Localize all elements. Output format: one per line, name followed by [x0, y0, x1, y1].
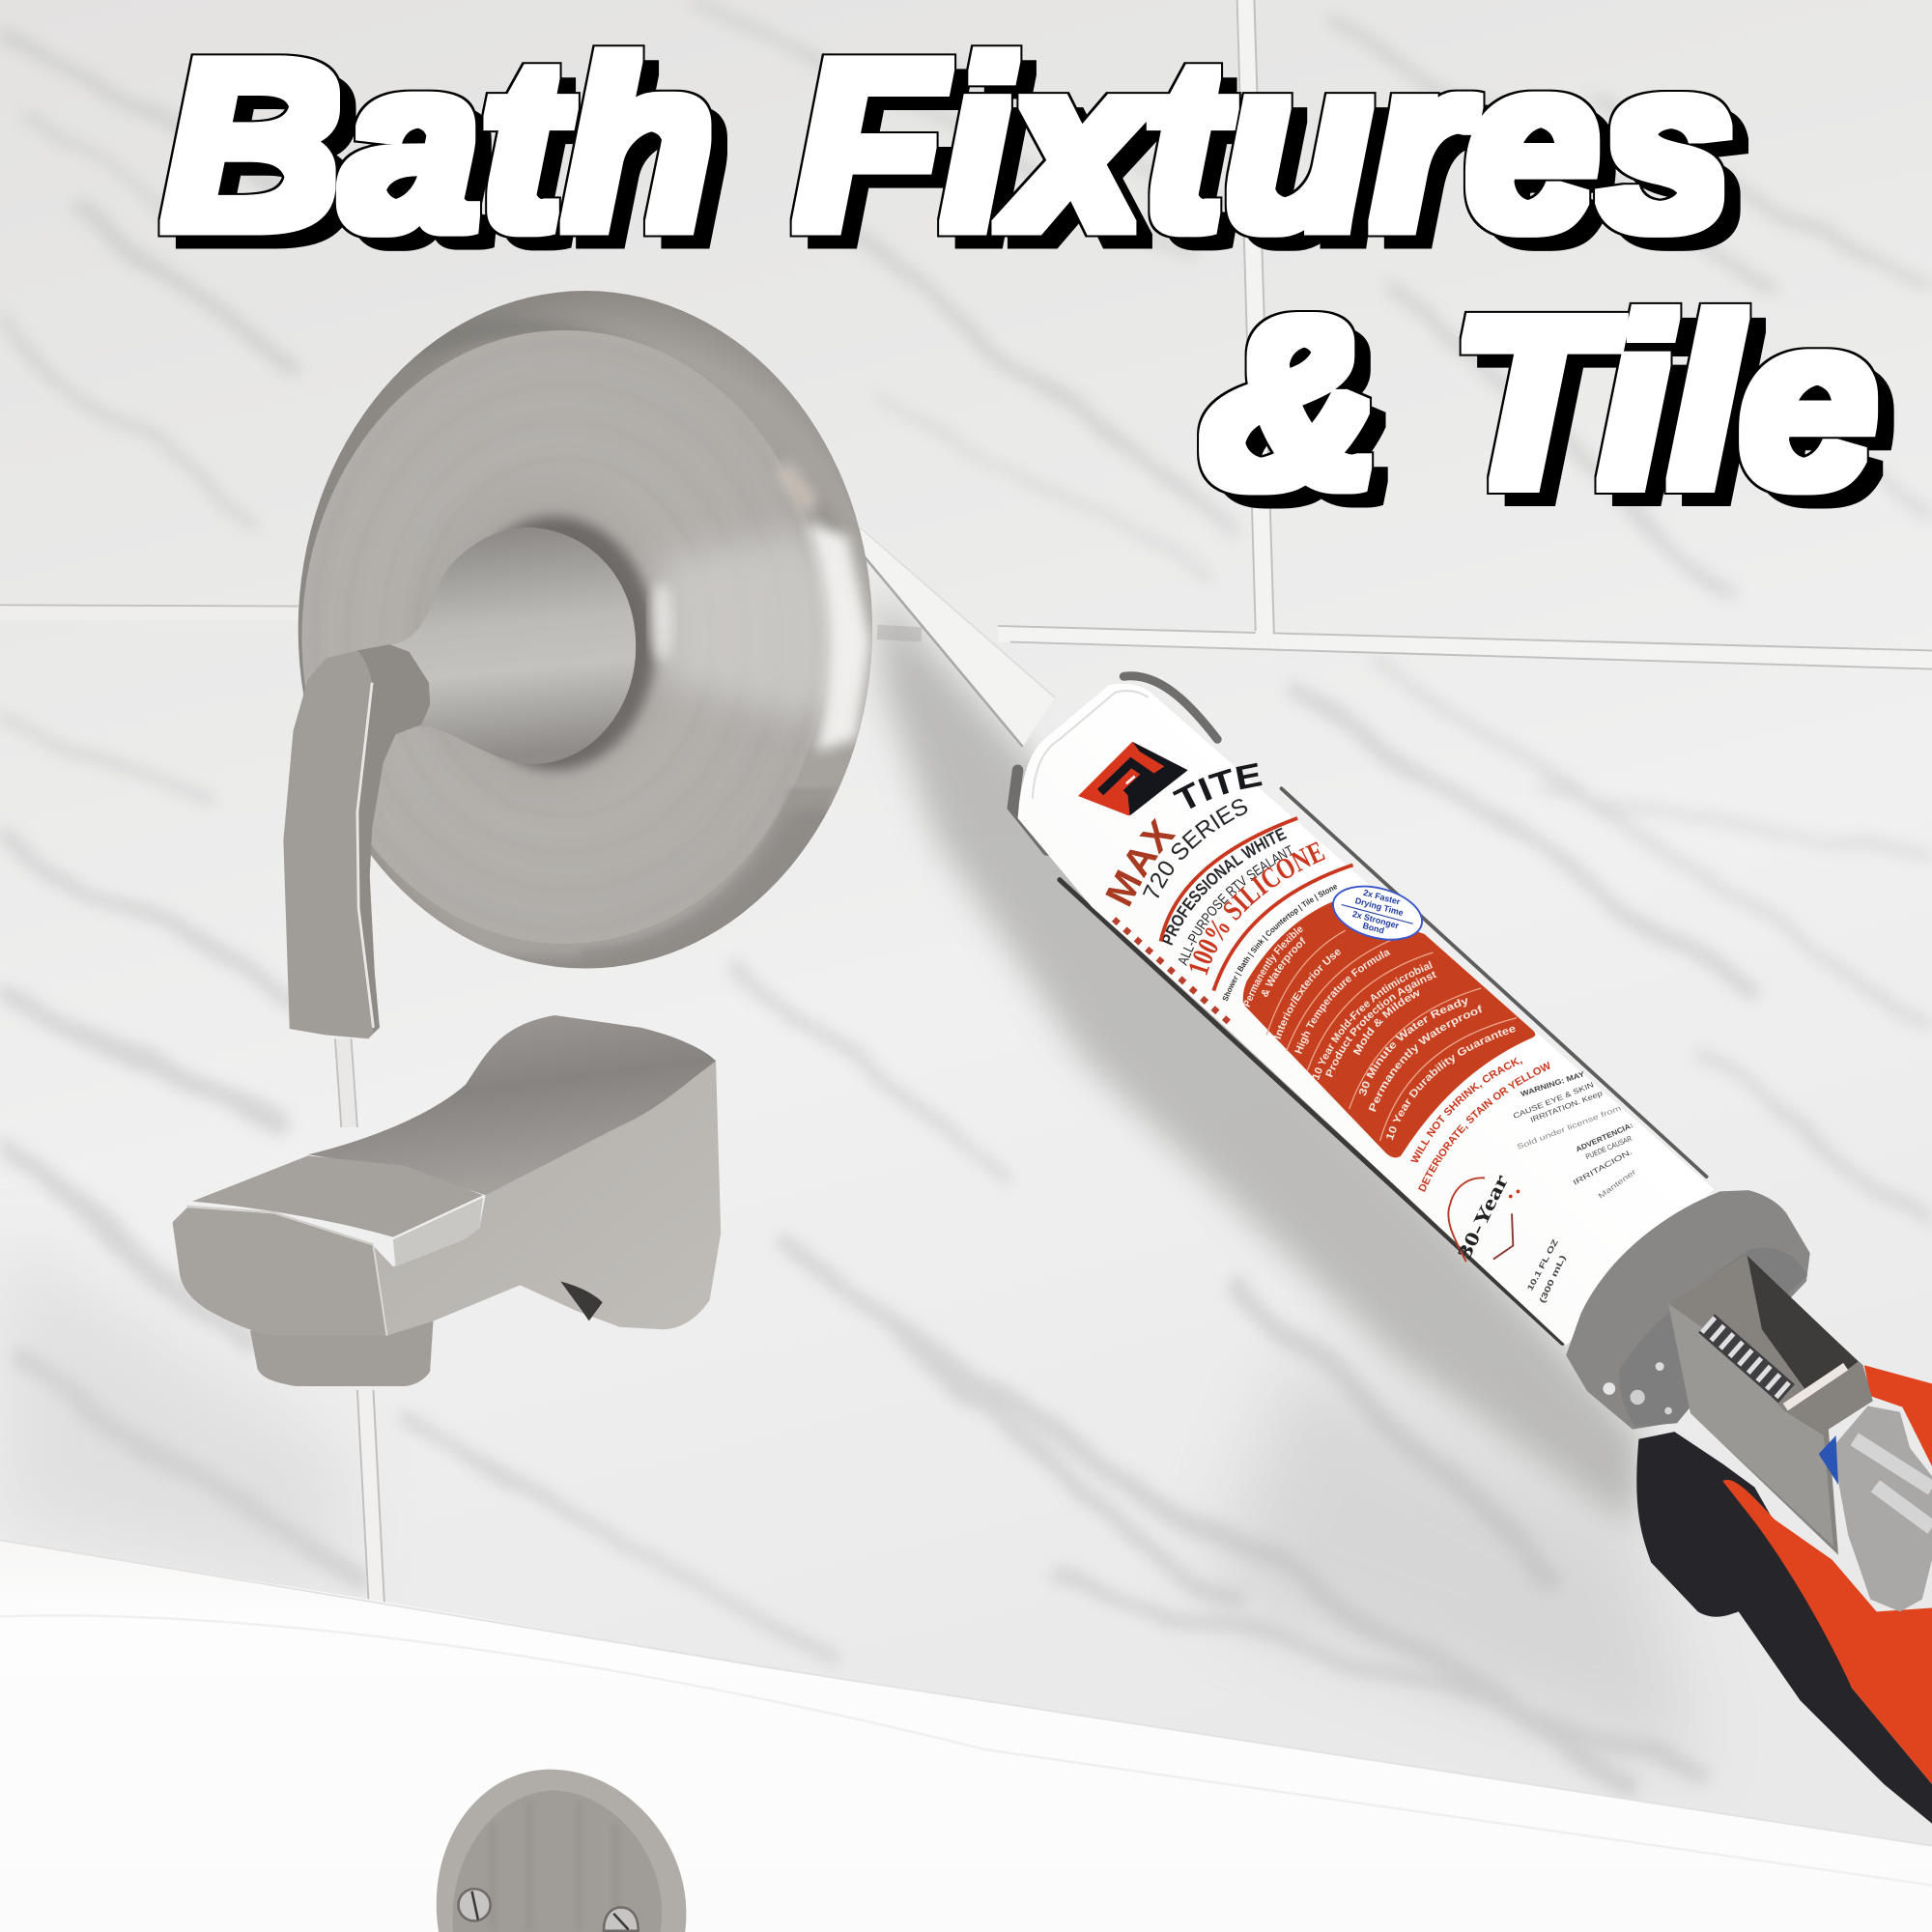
product text: PROFESSIONAL WHITE — [1163, 827, 1287, 946]
caulk gun frame behind tube — [1012, 676, 1707, 1343]
warning and claims text: IRRITATION. Keep — [1529, 1089, 1604, 1124]
concentric brushing — [314, 344, 814, 930]
warning and claims text: WILL NOT SHRINK, CRACK, — [1409, 1055, 1524, 1166]
warranty shield: 10.1 FL OZ — [1524, 1237, 1560, 1293]
spout top surface — [308, 1015, 716, 1195]
warning and claims text: IRRITACION. — [1572, 1148, 1634, 1187]
product text: Shower | Bath | Sink | Countertop | Tile | Stone — [1223, 885, 1337, 1001]
hub highlight — [650, 582, 672, 662]
clamp — [1833, 1406, 1932, 1611]
spout front lip — [173, 1208, 387, 1336]
red feature panel: Product Protection Against — [1323, 969, 1438, 1079]
hub recess — [453, 516, 656, 770]
warning and claims text: Sold under license from — [1516, 1103, 1622, 1151]
badge: faster drying: 2x Faster — [1362, 888, 1402, 907]
warning and claims text: CAUSE EYE & SKIN — [1512, 1080, 1595, 1121]
warranty shield — [1448, 1172, 1568, 1304]
brand name — [1096, 756, 1265, 913]
spout mid plate — [192, 1155, 483, 1237]
product text: 100% SILICONE — [1189, 841, 1325, 976]
red feature panel: Interior/Exterior Use — [1272, 946, 1344, 1040]
red feature panel: Permanently Waterproof — [1367, 1004, 1485, 1114]
screws — [458, 1889, 639, 1931]
warning and claims text: PUEDE CAUSAR — [1584, 1134, 1634, 1161]
spout base — [250, 1314, 434, 1386]
bathtub — [0, 1540, 1932, 1932]
work glove — [1636, 1365, 1932, 1824]
caulk tube — [1018, 684, 1714, 1346]
lever collar — [357, 644, 430, 1033]
valve handle cone — [392, 527, 636, 764]
valve lever handle — [283, 644, 430, 1038]
spring — [1707, 1323, 1786, 1394]
title: Fixtures — [795, 11, 1734, 279]
spout hole — [560, 1282, 603, 1321]
warranty shield: 30-Year — [1454, 1172, 1513, 1263]
spout silver strip — [393, 1198, 483, 1266]
brand name: TITE — [1173, 763, 1263, 810]
shower valve trim plate — [298, 291, 872, 985]
product text — [1138, 793, 1353, 1003]
red feature panel: & Waterproof — [1262, 937, 1306, 997]
tub spout — [173, 1015, 721, 1386]
warranty shield: (300 mL) — [1537, 1253, 1568, 1304]
brand logo — [1078, 742, 1188, 815]
warning and claims text: WARNING: MAY — [1520, 1069, 1585, 1098]
red feature panel: 10 Year Durability Guarantee — [1384, 1023, 1518, 1142]
silicone bead — [848, 524, 1055, 747]
spout side body — [373, 1061, 721, 1336]
product text: ALL-PURPOSE RTV SEALANT — [1179, 844, 1292, 966]
red feature panel: Permanently Flexible — [1242, 927, 1303, 1008]
tub overflow drain plate — [437, 1770, 686, 1932]
brand name: MAX — [1105, 817, 1177, 907]
badge: faster drying: Bond — [1362, 921, 1385, 936]
badge: faster drying: 2x Stronger — [1351, 909, 1401, 930]
title: Bath — [162, 11, 715, 279]
tube cast shadow — [877, 591, 1645, 1528]
warning and claims text: ADVERTENCIA: — [1575, 1121, 1634, 1153]
caulk gun bracket — [1668, 1256, 1932, 1611]
product text: 720 SERIES — [1142, 799, 1248, 898]
badge: faster drying: Drying Time — [1354, 895, 1405, 918]
red feature panel: 10 Year Mold-Free Antimicrobial — [1310, 959, 1435, 1082]
warning and claims text — [1409, 1055, 1638, 1201]
title — [162, 11, 1878, 537]
warning and claims text: Mantener — [1597, 1167, 1638, 1201]
caulk tube base collar — [1566, 1190, 1810, 1430]
badge: faster drying — [1327, 877, 1428, 949]
title: & Tile — [1200, 269, 1878, 537]
red feature panel — [1241, 902, 1535, 1157]
red feature panel: Mold & Mildew — [1351, 987, 1423, 1057]
red feature panel: High Temperature Formula — [1293, 946, 1393, 1056]
warning and claims text: DETERIORATE, STAIN OR YELLOW — [1416, 1060, 1553, 1194]
red feature panel: 30 Minute Water Ready — [1357, 995, 1470, 1097]
